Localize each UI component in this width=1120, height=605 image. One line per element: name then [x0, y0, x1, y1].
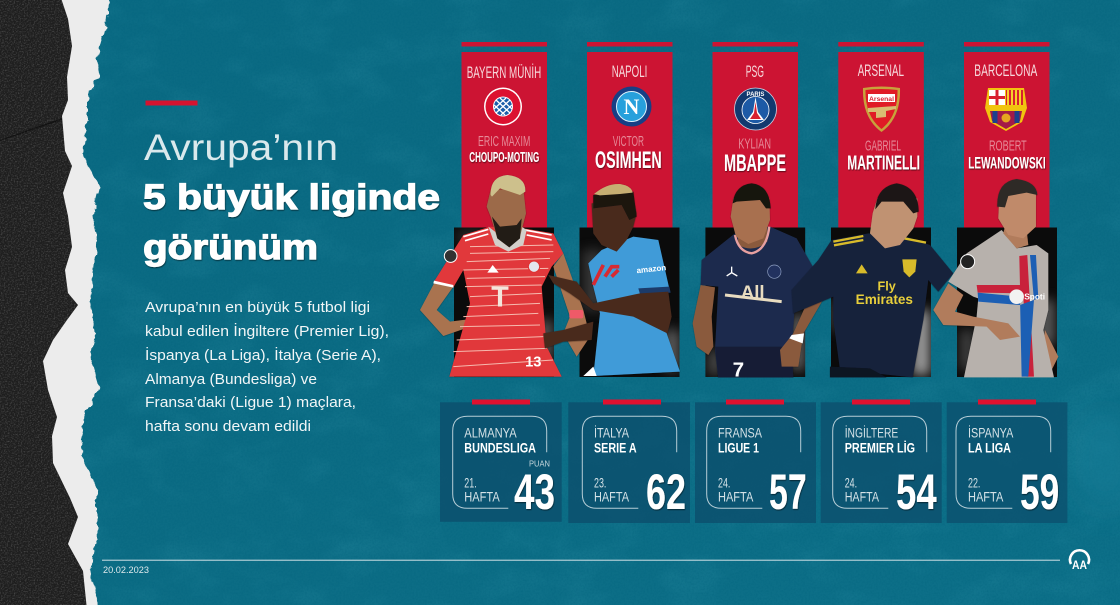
league card: İtalya: 62 [646, 464, 686, 520]
league card: İngiltere: HAFTA [845, 490, 879, 505]
league card: İspanya: 59 [1020, 464, 1059, 520]
league card: İspanya: 22. [968, 476, 980, 491]
league card: İtalya: İTALYA [594, 426, 629, 441]
player: Osimhen [543, 184, 680, 376]
league card: Fransa: 57 [769, 464, 807, 520]
icon: Arsenal crest [863, 86, 900, 132]
torn white paper edge [0, 0, 110, 605]
league card: İtalya: 23. [594, 476, 606, 491]
player: Choupo-Moting [420, 175, 590, 377]
panel: Napoli [587, 42, 672, 228]
league card: İngiltere: PREMIER LİG [845, 440, 915, 455]
description text: kabul edilen İngiltere (Premier Lig), [145, 322, 389, 340]
date: 20.02.2023 [103, 565, 149, 576]
description text: İspanya (La Liga), İtalya (Serie A), [145, 346, 381, 364]
description text: Avrupa’nın en büyük 5 futbol ligi [145, 300, 370, 316]
panel: Barcelona: BARCELONA [974, 61, 1038, 80]
description text: Fransa’daki (Ligue 1) maçlara, [145, 395, 356, 411]
description text: hafta sonu devam edildi [145, 419, 311, 435]
player: Mbappe: All [741, 281, 765, 302]
title: görünüm [143, 228, 318, 267]
icon: Napoli crest: N [624, 94, 640, 119]
player: Martinelli: Fly [877, 280, 896, 294]
league card: Fransa: FRANSA [718, 426, 762, 441]
player: Choupo-Moting: T [491, 282, 509, 314]
icon: PSG crest [734, 88, 776, 130]
league card: İspanya [947, 400, 1067, 523]
player: Mbappe [693, 183, 827, 382]
league card: İngiltere [821, 400, 942, 523]
footer line [102, 560, 1060, 561]
player: Martinelli [792, 183, 953, 377]
player: Mbappe: 7 [733, 359, 744, 382]
panel: Napoli: NAPOLI [612, 62, 647, 81]
league card: Fransa: 24. [718, 476, 730, 491]
panel: PSG: MBAPPE [724, 150, 786, 177]
league card: Almanya [440, 400, 562, 522]
panel: PSG: PSG [746, 62, 764, 81]
icon: AA logo [1070, 550, 1089, 572]
icon: PSG crest: PARIS [747, 92, 764, 98]
player: Choupo-Moting: 13 [525, 355, 541, 371]
league card: Almanya: BUNDESLIGA [464, 440, 536, 455]
league card: Fransa: LIGUE 1 [718, 440, 759, 455]
league card: İtalya: HAFTA [594, 490, 629, 505]
player: Lewandowski: Spoti [1024, 291, 1045, 301]
league card: İngiltere: İNGİLTERE [845, 426, 898, 441]
icon: AA logo: AA [1072, 558, 1087, 572]
icon: Arsenal crest: Arsenal [869, 96, 894, 103]
panel: Bayern Münih: ERIC MAXIM [478, 133, 530, 150]
league card: Almanya: 21. [464, 476, 477, 491]
panel: Bayern Münih [462, 42, 547, 228]
league card: İtalya: SERIE A [594, 440, 637, 455]
panel: Barcelona [964, 42, 1050, 228]
league card: İspanya: İSPANYA [968, 426, 1013, 441]
panel: Barcelona: ROBERT [989, 138, 1027, 155]
player: Martinelli: Emirates [856, 291, 913, 307]
panel: Bayern Münih: CHOUPO-MOTING [469, 150, 539, 166]
panel: Arsenal [838, 42, 924, 228]
league card: Almanya: HAFTA [464, 490, 500, 505]
panel: Bayern Münih: BAYERN MÜNİH [467, 63, 541, 82]
league card: İngiltere: 24. [845, 476, 857, 491]
league card: Almanya: ALMANYA [464, 426, 517, 441]
panel: PSG [712, 42, 798, 228]
icon: Barcelona crest [985, 88, 1027, 131]
player: Lewandowski [933, 179, 1058, 377]
league card: İspanya: LA LIGA [968, 440, 1011, 455]
league card: İspanya: HAFTA [968, 490, 1003, 505]
panel: Arsenal: ARSENAL [858, 61, 904, 80]
icon: Napoli crest [612, 86, 652, 126]
league card: Almanya: 43 [514, 464, 555, 520]
title [143, 127, 440, 267]
panel: PSG: KYLIAN [738, 135, 771, 152]
league card: Fransa: HAFTA [718, 490, 753, 505]
panel: Arsenal: GABRIEL [865, 138, 901, 155]
panel: Arsenal: MARTINELLI [847, 152, 920, 174]
league card: Almanya: PUAN [529, 459, 550, 469]
panel: Barcelona: LEWANDOWSKI [968, 154, 1046, 173]
panel: Napoli: VICTOR [613, 133, 644, 150]
league card: Fransa [695, 400, 816, 523]
title: Avrupa’nın [144, 127, 338, 168]
panel: Napoli: OSIMHEN [595, 147, 662, 174]
description text [145, 300, 389, 435]
league card: İtalya [568, 400, 690, 523]
accent bar [146, 100, 198, 106]
player: Osimhen: amazon [636, 263, 667, 275]
description text: Almanya (Bundesliga) ve [145, 372, 317, 388]
league card: İngiltere: 54 [896, 464, 937, 520]
black torn panel [0, 0, 86, 605]
icon: Bayern crest [484, 88, 522, 126]
title: 5 büyük liginde [143, 178, 440, 217]
photo panel backgrounds [454, 228, 1057, 377]
